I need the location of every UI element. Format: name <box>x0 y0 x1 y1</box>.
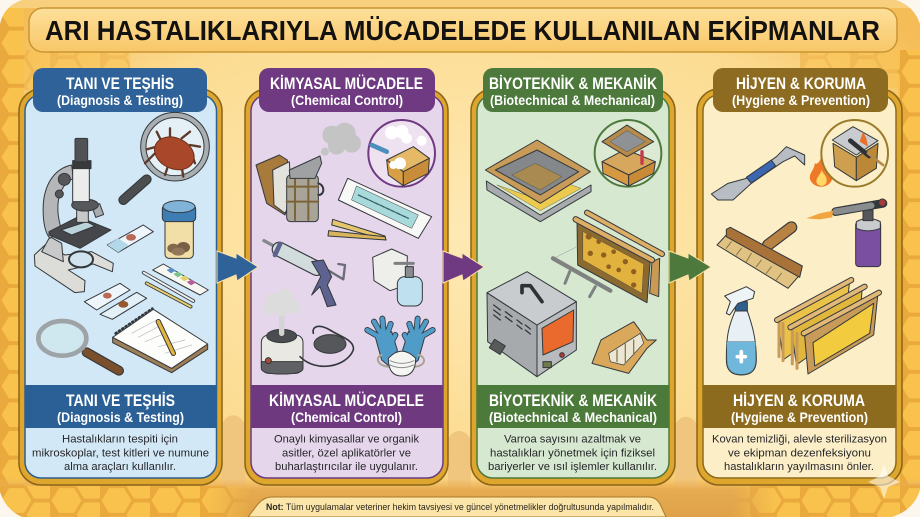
band: chemical title: KİMYASAL MÜCADELE <box>269 391 424 410</box>
header: diagnosis: TANI VE TEŞHİS <box>66 75 174 93</box>
icon: blowtorch <box>806 199 886 267</box>
header: biotechnical <box>483 68 663 112</box>
band: hygiene title: (Hygiene & Prevention) <box>731 409 868 425</box>
band: chemical title <box>251 385 443 428</box>
panel: biotechnical and mechanical <box>471 68 675 485</box>
icon: hive frames <box>777 280 879 374</box>
arrow: diagnosis to chemical <box>217 251 258 283</box>
icon: hand lens <box>38 321 119 371</box>
band: hygiene title <box>703 385 896 428</box>
text: chemical description: Onaylı kimyasallar ve organik <box>274 434 419 446</box>
icon: hive sterilisation inset <box>821 120 888 187</box>
icon: magnifier with mite <box>123 112 209 200</box>
text: biotechnical description: Varroa sayısını azaltmak ve <box>504 434 641 446</box>
icon: metal rail <box>553 247 610 297</box>
icon: screen bottom board and tray <box>485 140 591 222</box>
header: chemical <box>259 68 435 112</box>
band: hygiene title: HİJYEN & KORUMA <box>733 391 865 410</box>
icon: treated hive inset <box>368 120 435 187</box>
arrow: biotechnical to hygiene <box>669 251 711 283</box>
header: chemical: (Chemical Control) <box>291 93 403 108</box>
text: biotechnical description <box>488 434 657 473</box>
text: diagnosis description: Hastalıkların tespiti için <box>62 434 178 446</box>
icons: biotechnical tools <box>485 120 662 377</box>
header: diagnosis <box>33 68 207 112</box>
icon: heat treatment oven <box>487 272 576 377</box>
text: biotechnical description: hastalıkları yönetmek için fiziksel <box>490 448 655 460</box>
text: chemical description: asitler, özel aplikatörler ve <box>282 448 411 460</box>
icon: scrub brush <box>717 227 802 288</box>
text: diagnosis description: alma araçları kullanılır. <box>64 461 176 473</box>
band: biotechnical title: BİYOTEKNİK & MEKANİK <box>489 391 658 410</box>
footer note: Not: Tüm uygulamalar veteriner hekim tavsiyesi ve güncel yönetmelikler doğrultusunda yapılmalıdır. <box>266 502 654 512</box>
icon: disinfectant spray bottle <box>725 287 756 375</box>
band: biotechnical title: (Biotechnical & Mechanical) <box>489 409 657 425</box>
icon: treatment strip sachet <box>338 178 432 238</box>
text: chemical description: buharlaştırıcılar ile uygulanır. <box>275 461 418 473</box>
band: diagnosis title: (Diagnosis & Testing) <box>57 409 184 425</box>
panel: diagnosis and testing <box>19 68 222 485</box>
icon: microscope <box>34 138 113 293</box>
icon: queen cage <box>592 322 656 373</box>
text: diagnosis description: mikroskoplar, test kitleri ve numune <box>32 448 209 460</box>
text: hygiene description <box>712 434 887 473</box>
icon: test strips <box>144 264 208 307</box>
icon: wooden strips <box>328 219 386 240</box>
arrow: chemical to biotechnical <box>443 251 484 283</box>
band: diagnosis title <box>25 385 216 428</box>
header: chemical: KİMYASAL MÜCADELE <box>270 74 423 93</box>
icon: vaporiser container and bottle <box>373 249 422 306</box>
icon: electric vaporiser <box>261 289 353 374</box>
text: biotechnical description: bariyerler ve ısıl işlemler kullanılır. <box>488 461 657 473</box>
text: hygiene description: ve ekipman dezenfeksiyonu <box>728 448 871 460</box>
icons: diagnosis tools <box>34 112 209 373</box>
header: biotechnical: BİYOTEKNİK & MEKANİK <box>489 75 657 93</box>
header: biotechnical: (Biotechnical & Mechanical) <box>490 93 655 108</box>
header: hygiene <box>713 68 888 112</box>
panel: chemical control <box>245 68 448 485</box>
icon: brood frames with comb <box>576 213 662 303</box>
icon: applicator gun <box>264 241 345 307</box>
icons: chemical tools <box>256 120 435 376</box>
icon: flame <box>810 153 833 187</box>
band: chemical title: (Chemical Control) <box>291 409 402 425</box>
icons: hygiene tools <box>711 120 888 375</box>
title banner <box>29 8 897 52</box>
footer note <box>248 497 666 517</box>
icon: hive tool <box>711 147 805 200</box>
band: biotechnical title <box>477 385 669 428</box>
icon: glass slides <box>84 225 153 319</box>
icon: bee smoker <box>256 123 361 222</box>
text: diagnosis description <box>32 434 209 473</box>
panel: hygiene and prevention <box>697 68 902 485</box>
text: hygiene description: Kovan temizliği, alevle sterilizasyon <box>712 434 887 446</box>
icon: notepad and pencil <box>113 309 208 373</box>
icon: gloves and mask <box>367 319 433 376</box>
icon: screened hive inset <box>595 120 661 187</box>
text: hygiene description: hastalıkların yayılmasını önler. <box>724 461 874 473</box>
header: diagnosis: (Diagnosis & Testing) <box>57 93 183 108</box>
icon: sample jar <box>162 201 196 258</box>
band: diagnosis title: TANI VE TEŞHİS <box>66 391 175 410</box>
text: chemical description <box>274 434 419 473</box>
header: hygiene: (Hygiene & Prevention) <box>732 93 870 108</box>
header: hygiene: HİJYEN & KORUMA <box>736 75 866 93</box>
